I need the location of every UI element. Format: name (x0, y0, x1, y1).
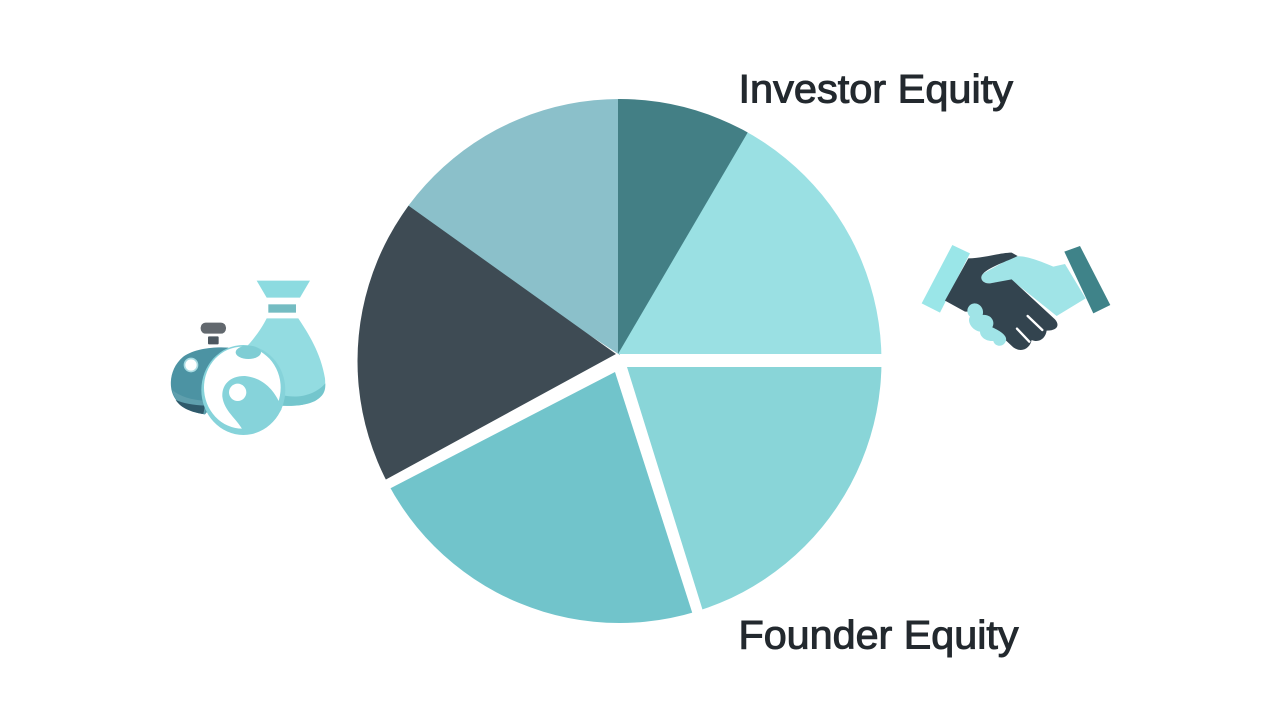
back coin (171, 347, 238, 414)
label: Founder Equity: Founder Equity (738, 614, 1019, 658)
fingers (967, 303, 1006, 346)
slice: dark slate (358, 206, 616, 480)
right hand (981, 256, 1086, 316)
slice: light aqua (618, 129, 882, 354)
left hand (945, 253, 1057, 350)
pie chart (358, 99, 882, 623)
slice: grey teal (402, 99, 620, 355)
slice: lower right aqua (627, 367, 882, 610)
slice: dark teal (618, 99, 748, 354)
money bag (245, 281, 325, 406)
coin cap (201, 323, 226, 344)
finger gaps (1017, 316, 1042, 342)
icon: handshake (922, 245, 1110, 350)
slice: lower teal (390, 372, 692, 623)
right cuff (1064, 246, 1110, 313)
icon: money bag and coins (171, 281, 325, 435)
label: Investor Equity: Investor Equity (738, 68, 1013, 112)
front coin (201, 345, 285, 435)
left cuff (922, 245, 970, 313)
